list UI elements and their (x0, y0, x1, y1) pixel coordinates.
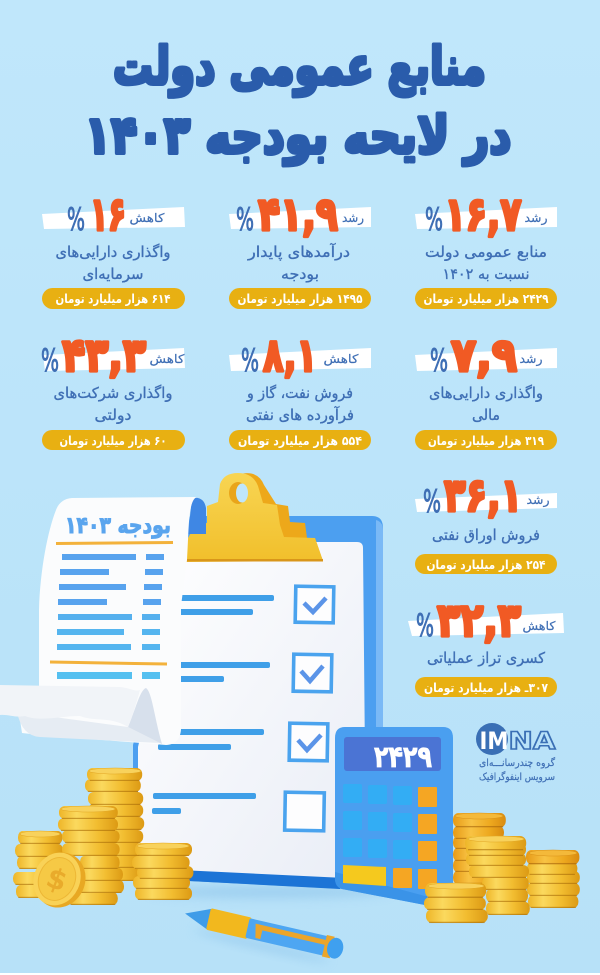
ribbon (229, 348, 371, 371)
stat card: public resources: ۲۴۲۹ هزار میلیارد تومان (424, 291, 549, 306)
amount pill (229, 288, 371, 309)
stat card: financial assets (415, 328, 557, 450)
percent sign: % (423, 484, 441, 520)
description: کسری تراز عملیاتی (427, 649, 546, 667)
bottom edge (0, 973, 600, 975)
checkbox 4 (285, 792, 324, 831)
percent value: ۴۱,۹ (258, 187, 338, 241)
change label: کاهش (522, 619, 556, 634)
stat card: capital asset disposal: سرمایه‌ای (82, 265, 144, 283)
percent value: ۷,۹ (451, 328, 517, 382)
percent value: ۳۲,۳ (437, 593, 521, 647)
calculator display value: ۲۴۲۹ (374, 740, 432, 775)
change label: رشد (342, 211, 364, 226)
receipt sheet (17, 497, 197, 745)
stat card: oil bonds: ۲۵۴ هزار میلیارد تومان (426, 557, 546, 572)
description: درآمدهای پایدار (247, 243, 350, 262)
pen shadow (193, 926, 331, 965)
tall stack (85, 768, 144, 881)
change label: کاهش (130, 211, 165, 226)
stat card: sustainable revenues (229, 187, 371, 309)
percent value: ۸,۱ (263, 328, 317, 382)
calculator body (335, 727, 453, 905)
middle stack (465, 836, 530, 915)
clipboard (133, 473, 390, 898)
paper (138, 542, 365, 878)
logo: IMNA (476, 723, 556, 783)
clip (185, 473, 323, 562)
ribbon (415, 348, 557, 371)
title (85, 37, 512, 166)
description: فروش نفت، گاز و (246, 384, 353, 402)
right stack (526, 850, 580, 908)
amount pill (415, 554, 557, 574)
checklist lines (152, 595, 274, 814)
receipt curl (0, 685, 162, 744)
board (133, 516, 383, 889)
receipt heading: بودجه ۱۴۰۳ (65, 513, 171, 539)
ribbon (43, 348, 185, 371)
stat card: public resources (415, 187, 557, 309)
receipt rules (50, 542, 173, 679)
pen barrel (245, 918, 335, 957)
pen clip (252, 924, 328, 954)
stat card: state company disposal: ۶۰ هزار میلیارد تومان (60, 433, 166, 448)
amount pill (415, 288, 557, 309)
left small stack (13, 831, 63, 898)
change label: رشد (524, 211, 548, 226)
logo: IMNA: سرویس اینفوگرافیک (479, 771, 555, 783)
checkbox 3 (289, 723, 328, 761)
description: فروش اوراق نفتی (432, 526, 540, 544)
change label: کاهش (150, 352, 185, 367)
percent value: ۴۳,۳ (62, 328, 146, 382)
ribbon (42, 207, 185, 229)
calculator screen (344, 737, 441, 771)
ribbon (408, 613, 564, 636)
stat card: sustainable revenues: بودجه (281, 265, 319, 283)
ribbon (415, 207, 557, 229)
pen grip (206, 908, 252, 939)
description: واگذاری دارایی‌های (429, 384, 543, 402)
right small stack (132, 843, 193, 900)
description: واگذاری شرکت‌های (54, 384, 172, 402)
change label: رشد (526, 493, 550, 508)
change label: رشد (520, 352, 543, 367)
coin stacks: right (424, 813, 580, 923)
change label: کاهش (324, 352, 359, 367)
logo: IMNA: IM (480, 727, 508, 755)
percent sign: % (67, 202, 85, 238)
logo caption: گروه چندرسانـــه‌ای (479, 757, 555, 769)
percent sign: % (425, 202, 443, 238)
logo mark (476, 723, 508, 755)
icon: dollar coin: $ (42, 861, 72, 898)
stat card: operating balance deficit: ۳۰۷ـ هزار میلیارد تومان (424, 680, 548, 695)
percent sign: % (430, 343, 448, 379)
calculator (335, 727, 453, 905)
stat card: capital asset disposal (42, 187, 185, 309)
icon: dollar coin (25, 844, 94, 916)
pen end (322, 935, 335, 958)
percent sign: % (41, 343, 59, 379)
amount pill (415, 430, 557, 450)
stat card: capital asset disposal: ۶۱۴ هزار میلیارد تومان (56, 291, 171, 306)
receipt (0, 497, 206, 745)
stat card: sustainable revenues: ۱۴۹۵ هزار میلیارد تومان (238, 291, 363, 306)
percent sign: % (241, 343, 259, 379)
checkbox 1 (295, 586, 334, 623)
logo: IMNA: NA (508, 727, 556, 755)
amount pill (415, 677, 557, 697)
pen tip (183, 903, 213, 930)
stat card: state company disposal: دولتی (94, 406, 132, 424)
stat card: oil and gas sales (229, 328, 371, 450)
stat card: financial assets: مالی (472, 406, 500, 424)
icon: pen (181, 903, 345, 968)
amount pill (42, 430, 185, 450)
stat card: oil and gas sales: فرآورده های نفتی (246, 406, 354, 424)
description: منابع عمومی دولت (425, 243, 547, 261)
checkbox 2 (293, 654, 332, 692)
percent sign: % (236, 202, 254, 238)
back stack (453, 813, 506, 884)
amount pill (229, 430, 371, 450)
calculator keys (343, 784, 437, 889)
title line 2: در لایحه بودجه ۱۴۰۳ (85, 106, 512, 166)
amount pill (42, 288, 185, 309)
ribbon (229, 207, 371, 229)
percent sign: % (416, 608, 434, 644)
stat card: operating balance deficit (408, 593, 564, 697)
percent value: ۱۶,۷ (444, 187, 522, 241)
stat card: financial assets: ۳۱۹ هزار میلیارد تومان (428, 433, 544, 448)
stat card: state company disposal (41, 328, 185, 450)
stat card: public resources: نسبت به ۱۴۰۲ (442, 265, 530, 283)
ground shadow (150, 886, 390, 898)
percent value: ۳۶,۱ (444, 468, 522, 522)
front stack (424, 883, 488, 923)
ribbon (415, 493, 557, 512)
medium stack (58, 806, 124, 905)
stat card: oil bonds (415, 468, 557, 574)
coin stacks: left (13, 768, 193, 916)
percent value: ۱۶ (90, 187, 126, 241)
description: واگذاری دارایی‌های (56, 243, 170, 261)
title line 1: منابع عمومی دولت (113, 37, 486, 97)
curl shadow inside (188, 498, 206, 534)
stat card: oil and gas sales: ۵۵۴ هزار میلیارد تومان (238, 433, 362, 448)
